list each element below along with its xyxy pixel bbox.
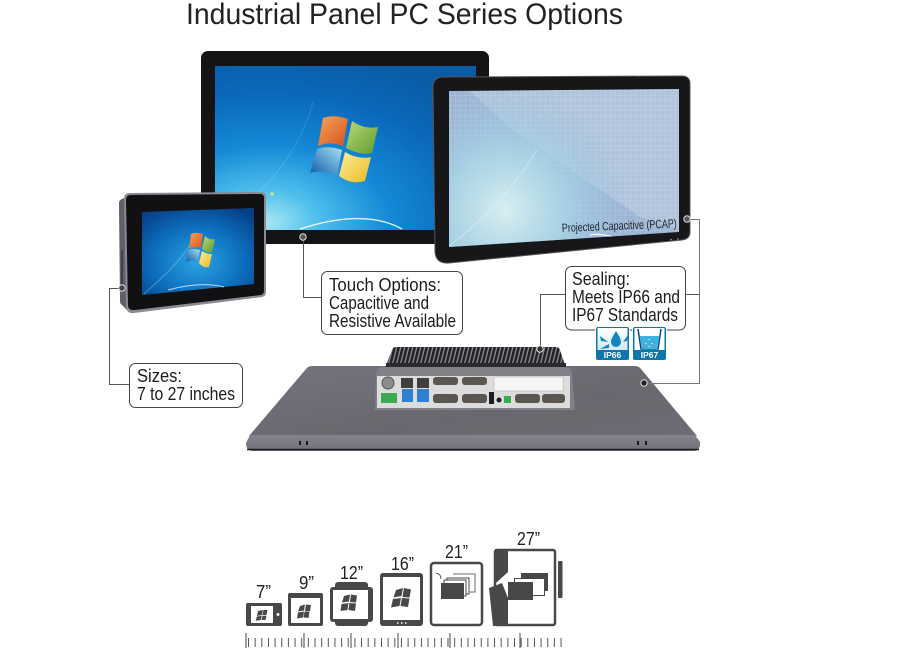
size icon: 7 inch: 7” [256,582,271,602]
size icon: 9 inch: 9” [299,573,314,593]
size icon: 21 inch [431,542,482,625]
leader lines: sealing [537,216,700,386]
callout: touch options: Capacitive and [329,292,429,313]
connector bracket [375,367,575,410]
icon: IP67 badge [632,326,667,361]
size icon: 12 inch: 12” [340,563,363,583]
size icon: 16 inch [380,554,423,626]
leader lines: sizes [110,285,129,384]
icon: IP66 badge [595,326,630,361]
callout: sealing [566,266,686,330]
icon: IP67 badge: IP67 [641,350,659,360]
callout: sealing: Meets IP66 and [572,286,680,307]
heat sink [385,347,566,368]
size icon: 27 inch: 27” [517,529,540,549]
right monitor: projected capacitive [433,76,690,263]
small monitor: 7 inch panel [119,192,266,313]
label: PCAP: Projected Capacitive (PCAP) [562,216,677,235]
leader lines: touch options [300,234,322,298]
callout: touch options: Resistive Available [329,310,456,331]
size chart [246,529,562,648]
callout: sizes: Sizes: [137,365,182,386]
size icon: 9 inch [288,573,323,626]
callout: sealing: IP67 Standards [572,304,678,325]
size icon: 12 inch [330,563,373,626]
callout: sealing: Sealing: [572,268,630,289]
size icon: 27 inch [489,529,562,626]
callout: touch options [322,272,462,334]
size icon: 16 inch: 16” [391,554,414,574]
icon: Windows logo small [186,233,215,267]
size icon: 7 inch [246,582,282,626]
size icon: 21 inch: 21” [445,542,468,562]
ruler [246,633,562,648]
icon: Windows logo [310,116,378,182]
rear panel PC with heat sink and ports [246,347,700,451]
large monitor: Windows desktop [201,51,489,244]
callout: sizes [130,364,242,408]
callout: touch options: Touch Options: [329,274,441,295]
icon: IP66 badge: IP66 [604,350,622,360]
callout: sizes: 7 to 27 inches [137,383,235,404]
